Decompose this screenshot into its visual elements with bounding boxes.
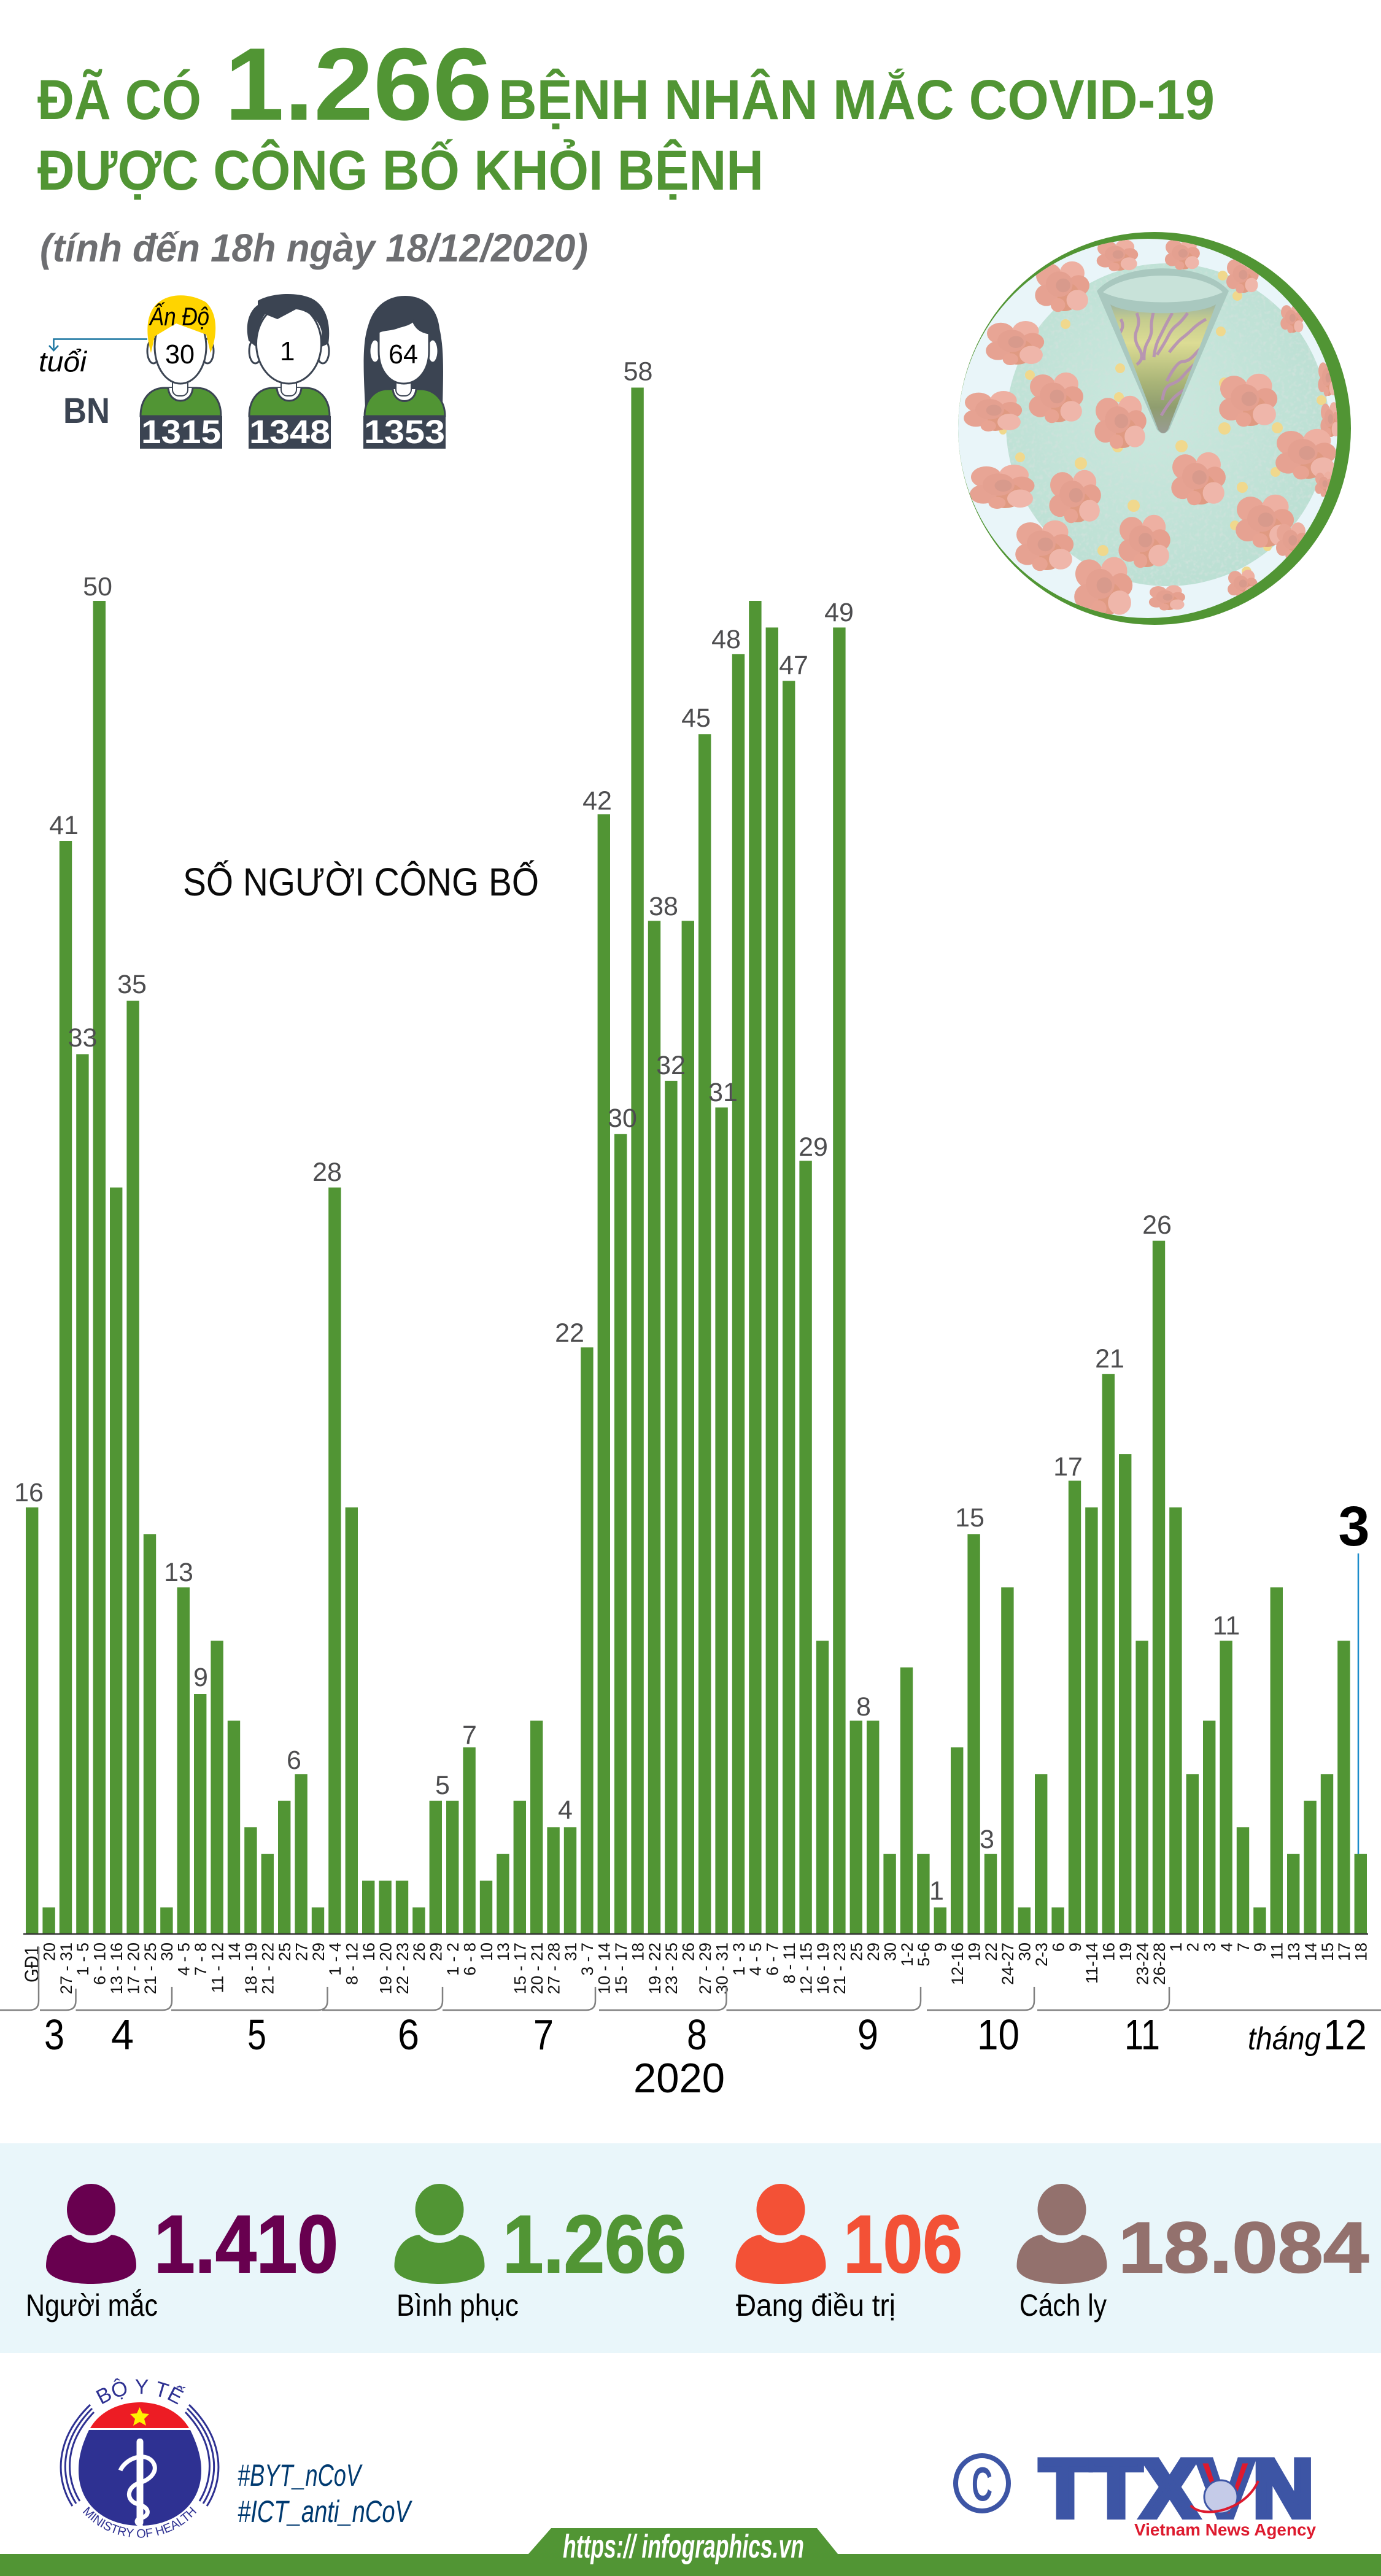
value labels: 26 — [1142, 1210, 1172, 1240]
stat: recovered — [394, 2184, 686, 2323]
value labels: 3 — [980, 1825, 994, 1854]
x axis date labels: 21 - 22 — [259, 1943, 277, 1994]
value labels: 9 — [193, 1663, 208, 1692]
x axis date labels: 11-14 — [1083, 1943, 1101, 1984]
x axis date labels: 22 — [982, 1943, 1000, 1961]
value labels: 4 — [558, 1795, 573, 1825]
x axis date labels: 17 - 20 — [124, 1943, 142, 1994]
x axis date labels: 4 - 5 — [746, 1943, 765, 1976]
month numbers: 3 — [44, 2011, 64, 2059]
footer bar — [0, 2528, 1381, 2576]
x axis date labels: 1 - 5 — [74, 1943, 92, 1976]
x axis date labels — [21, 1943, 1371, 1994]
value labels: 49 — [824, 598, 854, 627]
x axis date labels: 2 — [1184, 1943, 1202, 1952]
x axis date labels: 26 — [679, 1943, 698, 1961]
logo: Ministry of Health — [60, 2378, 220, 2538]
value labels: 17 — [1053, 1452, 1083, 1482]
x axis date labels: 19 - 20 — [376, 1943, 395, 1994]
x axis date labels: 22 - 23 — [393, 1943, 412, 1994]
x axis date labels: 15 — [1318, 1943, 1337, 1961]
month numbers: 7 — [533, 2011, 554, 2059]
age label with arrow — [39, 339, 147, 377]
hashtags: #ICT_anti_nCoV — [238, 2494, 413, 2529]
stat: recovered: Bình phục — [397, 2288, 519, 2323]
value labels: 47 — [779, 651, 808, 680]
patient 1353: 1353 — [364, 414, 445, 451]
stat: quarantine: 18.084 — [1118, 2207, 1369, 2288]
value labels: 22 — [555, 1318, 584, 1348]
x axis date labels: 27 - 28 — [544, 1943, 563, 1994]
x axis date labels: 4 - 5 — [175, 1943, 193, 1976]
value labels: 5 — [435, 1771, 450, 1800]
x axis date labels: 13 - 16 — [107, 1943, 126, 1994]
value labels: 30 — [608, 1104, 637, 1133]
x axis date labels: 27 - 29 — [696, 1943, 714, 1994]
hashtags — [238, 2458, 413, 2529]
month numbers: 10 — [977, 2011, 1019, 2059]
x axis date labels: 29 — [864, 1943, 883, 1961]
value labels: 45 — [681, 703, 711, 733]
x axis date labels: 1 - 3 — [730, 1943, 748, 1976]
value labels: 58 — [624, 357, 652, 387]
age label with arrow: tuổi — [39, 346, 88, 377]
stat: in treatment — [735, 2184, 962, 2323]
x axis date labels: 21 - 25 — [141, 1943, 160, 1994]
x axis date labels: 4 — [1217, 1943, 1236, 1952]
stat: in treatment: Đang điều trị — [736, 2288, 896, 2323]
x axis date labels: 1 - 2 — [444, 1943, 462, 1976]
x axis date labels: 14 — [225, 1943, 244, 1961]
x axis date labels: 23-24 — [1133, 1943, 1151, 1985]
logo: TTXVN: TTXVN — [1040, 2443, 1313, 2534]
title: ĐÃ CÓ — [37, 68, 201, 131]
stat: cases — [26, 2184, 338, 2323]
patient 1315: Ấn Độ — [149, 301, 209, 331]
stat: cases: 1.410 — [154, 2199, 338, 2290]
month brackets — [0, 1947, 1381, 2010]
month numbers: 9 — [857, 2011, 878, 2059]
month numbers: 11 — [1124, 2011, 1160, 2059]
x axis date labels: 9 — [1251, 1943, 1269, 1952]
x axis date labels: 1 - 4 — [326, 1943, 344, 1976]
value labels: 1 — [929, 1876, 944, 1906]
x axis date labels: 20 - 21 — [528, 1943, 546, 1994]
x axis date labels: 25 — [276, 1943, 294, 1961]
x axis date labels: 18 - 19 — [242, 1943, 260, 1994]
value labels: 28 — [312, 1158, 342, 1187]
value labels: 31 — [708, 1078, 738, 1107]
title: ĐƯỢC CÔNG BỐ KHỎI BỆNH — [37, 139, 764, 202]
title: 1.266 — [225, 26, 492, 142]
x axis date labels: 30 — [881, 1943, 899, 1961]
x axis date labels: 3 — [1201, 1943, 1219, 1952]
stat: quarantine: Cách ly — [1019, 2288, 1107, 2323]
x axis date labels: 13 — [1285, 1943, 1303, 1961]
bars — [26, 388, 1367, 1934]
title — [37, 26, 1215, 202]
chart heading: SỐ NGƯỜI CÔNG BỐ — [183, 860, 539, 904]
value labels: 29 — [799, 1132, 828, 1162]
latest value callout: 3 — [1338, 1495, 1370, 1558]
x axis date labels: 15 - 17 — [612, 1943, 630, 1994]
x axis date labels: 16 - 19 — [814, 1943, 832, 1994]
x axis date labels: 19 — [965, 1943, 983, 1961]
patient 1348: 1 — [280, 336, 295, 366]
x axis date labels: 27 - 31 — [57, 1943, 75, 1994]
x axis date labels: 1 — [1167, 1943, 1185, 1952]
x axis date labels: 20 — [40, 1943, 58, 1961]
x axis date labels: 12 - 15 — [797, 1943, 815, 1994]
patient 1348 — [247, 294, 331, 451]
month numbers: 6 — [398, 2011, 419, 2059]
logo: TTXVN: C — [972, 2457, 992, 2511]
x axis date labels: 30 — [158, 1943, 176, 1961]
stat: quarantine — [1016, 2184, 1369, 2323]
x axis date labels: 8 - 11 — [780, 1943, 799, 1984]
value labels: 15 — [955, 1503, 984, 1533]
x axis date labels: 19 — [1116, 1943, 1135, 1961]
month numbers: 4 — [111, 2011, 134, 2059]
x axis date labels: 14 — [1301, 1943, 1320, 1961]
BN label: BN — [63, 391, 110, 431]
value labels: 33 — [68, 1023, 97, 1053]
x axis date labels: 10 — [478, 1943, 496, 1961]
value labels: 42 — [582, 786, 612, 816]
month numbers: 8 — [687, 2011, 707, 2059]
x axis date labels: 7 — [1234, 1943, 1253, 1952]
x axis date labels: 16 — [1100, 1943, 1118, 1961]
x axis date labels: 11 — [1268, 1943, 1286, 1960]
x axis date labels: 9 — [932, 1943, 950, 1952]
x axis date labels: 18 — [1352, 1943, 1371, 1961]
patient 1353: 64 — [389, 339, 418, 369]
x axis date labels: 2-3 — [1032, 1943, 1051, 1967]
x axis date labels: 21 - 23 — [830, 1943, 849, 1994]
value labels: 8 — [856, 1692, 871, 1722]
stat: cases: Người mắc — [26, 2288, 158, 2323]
x axis date labels: 7 - 8 — [191, 1943, 210, 1976]
patient 1315: 30 — [165, 339, 195, 369]
stat: recovered: 1.266 — [503, 2199, 686, 2290]
month numbers: 2020 — [633, 2055, 725, 2102]
value labels: 41 — [49, 811, 79, 840]
x axis date labels: 10 - 14 — [595, 1943, 614, 1994]
x axis date labels: 31 — [562, 1943, 580, 1961]
x axis date labels: 6 - 10 — [91, 1943, 109, 1985]
patient 1353 — [363, 296, 446, 451]
value labels: 38 — [649, 892, 678, 921]
value labels: 48 — [711, 625, 741, 654]
x axis date labels: 29 — [309, 1943, 328, 1961]
value labels — [14, 357, 1240, 1906]
x axis date labels: 18 — [629, 1943, 647, 1961]
x axis date labels: 6 - 8 — [460, 1943, 479, 1976]
logo: Ministry of Health: BỘ Y TẾ — [96, 2378, 186, 2405]
stat: in treatment: 106 — [843, 2199, 962, 2290]
value labels: 16 — [14, 1478, 44, 1507]
title: BỆNH NHÂN MẮC COVID-19 — [498, 68, 1215, 131]
value labels: 11 — [1213, 1611, 1240, 1641]
x axis date labels: 25 — [848, 1943, 866, 1961]
footer bar: https:// infographics.vn — [563, 2528, 804, 2565]
virus illustration — [958, 232, 1351, 625]
value labels: 6 — [287, 1746, 301, 1775]
x axis date labels: 8 - 12 — [343, 1943, 362, 1985]
month numbers: 5 — [247, 2011, 266, 2059]
subtitle date: (tính đến 18h ngày 18/12/2020) — [40, 226, 588, 270]
x axis date labels: 23 - 25 — [662, 1943, 681, 1994]
patient 1315 — [140, 295, 222, 451]
x axis date labels: 6 — [1049, 1943, 1067, 1952]
x axis date labels: 3 - 7 — [578, 1943, 597, 1976]
value labels: 32 — [656, 1051, 686, 1080]
patient 1348: 1348 — [249, 414, 330, 451]
x axis date labels: 30 - 31 — [713, 1943, 731, 1994]
value labels: 35 — [117, 970, 147, 999]
bar chart — [0, 357, 1381, 2102]
month numbers — [44, 2011, 1367, 2102]
value labels: 21 — [1095, 1344, 1124, 1374]
hashtags: #BYT_nCoV — [238, 2458, 363, 2493]
x axis date labels: 19 - 22 — [646, 1943, 664, 1994]
x axis date labels: 30 — [1016, 1943, 1034, 1961]
x axis date labels: 27 — [292, 1943, 311, 1961]
x axis date labels: GĐ1 — [21, 1946, 43, 1982]
x axis date labels: 11 - 12 — [208, 1943, 226, 1993]
x axis date labels: 6 - 7 — [764, 1943, 782, 1976]
patient 1315: 1315 — [141, 414, 221, 451]
x axis date labels: 29 — [427, 1943, 446, 1961]
value labels: 13 — [164, 1558, 193, 1587]
x axis date labels: 15 - 17 — [511, 1943, 530, 1994]
icon: patients row legend — [39, 294, 446, 451]
x axis date labels: 5-6 — [915, 1943, 933, 1967]
x axis date labels: 26-28 — [1150, 1943, 1169, 1985]
month numbers: tháng — [1248, 2021, 1321, 2057]
logo: Ministry of Health: MINISTRY OF HEALTH — [83, 2507, 196, 2538]
value labels: 50 — [83, 572, 112, 601]
panel: summary stats — [0, 2143, 1381, 2353]
logo: TTXVN: Vietnam News Agency — [1134, 2520, 1316, 2539]
x axis date labels: 16 — [360, 1943, 378, 1961]
x axis date labels: 13 — [494, 1943, 513, 1961]
value labels: 7 — [462, 1720, 477, 1750]
x axis date labels: 17 — [1335, 1943, 1353, 1961]
x axis date labels: 9 — [1066, 1943, 1085, 1952]
x axis date labels: 12-16 — [948, 1943, 967, 1985]
x axis date labels: 24-27 — [999, 1943, 1017, 1985]
x axis date labels: 26 — [410, 1943, 428, 1961]
x axis date labels: 1-2 — [898, 1943, 916, 1967]
month numbers: 12 — [1323, 2011, 1367, 2059]
